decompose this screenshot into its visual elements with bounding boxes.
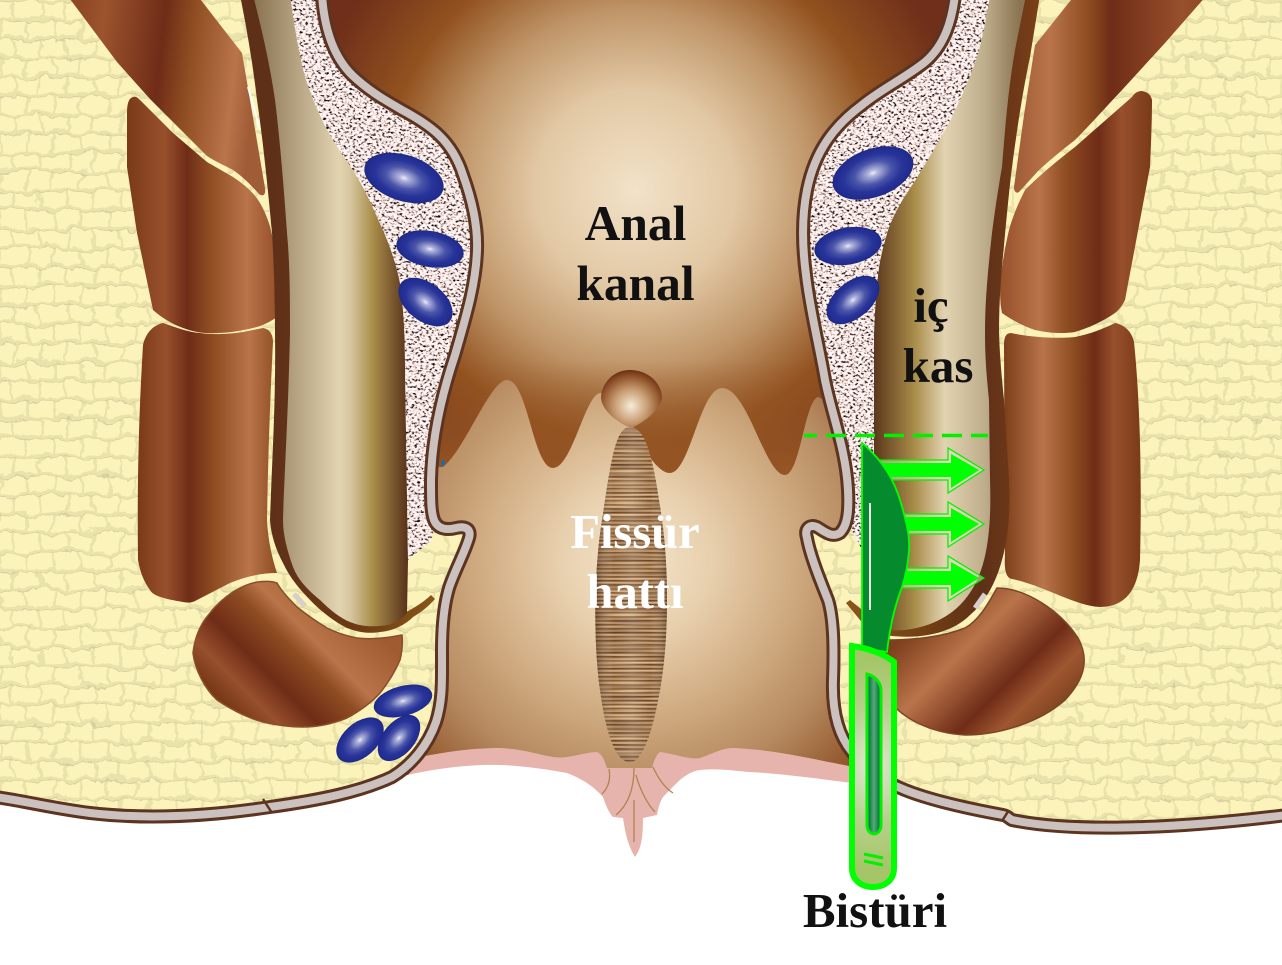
incision level dashed line bbox=[804, 434, 988, 437]
handle slot bbox=[867, 674, 881, 834]
haemorrhoidal veins left bbox=[358, 143, 467, 336]
muscle: left inner tan bbox=[253, 0, 408, 626]
muscle: left upper bbox=[67, 0, 265, 195]
muscle: right upper bbox=[1014, 0, 1207, 193]
label: iç kas: iç bbox=[913, 278, 949, 333]
sentinel polyp bbox=[601, 370, 662, 428]
icon: muscle outer band left bbox=[240, 0, 435, 633]
scalpel bbox=[852, 443, 909, 887]
right internal sphincter bbox=[846, 0, 1040, 637]
white outside body bbox=[0, 765, 1282, 965]
muscle: right middle bbox=[1000, 91, 1152, 333]
label: Anal kanal: kanal bbox=[576, 256, 695, 311]
label: Anal kanal: Anal bbox=[585, 196, 686, 251]
label: Fissür hattı: Fissür bbox=[570, 506, 700, 559]
fissure line bbox=[595, 427, 667, 762]
haemorrhoidal veins lower left bbox=[328, 679, 436, 771]
submucosa speckle left bbox=[290, 0, 470, 560]
left internal sphincter bbox=[240, 0, 435, 633]
rectal wall right bbox=[803, 0, 1282, 828]
right outer sphincter muscles bbox=[885, 0, 1207, 735]
label: Fissür hattı: hattı bbox=[586, 566, 684, 619]
muscle: left middle bbox=[127, 97, 277, 333]
anal canal lumen bbox=[329, 0, 948, 775]
scalpel blade bbox=[862, 443, 909, 652]
muscle: right ring bbox=[885, 588, 1084, 735]
arrows: sphincterotomy direction bbox=[877, 448, 984, 601]
submucosa speckle right bbox=[810, 0, 990, 548]
haemorrhoidal veins right bbox=[811, 136, 921, 334]
muscle: right lower bbox=[1004, 323, 1141, 607]
icon: small blue mark bbox=[441, 460, 445, 466]
muscle: left ring bbox=[193, 581, 402, 727]
arrow 1 bbox=[877, 448, 984, 493]
scalpel handle bbox=[852, 646, 894, 887]
icon: muscle outer band right bbox=[846, 0, 1040, 637]
anal skin tags bbox=[602, 767, 673, 842]
rectal wall left bbox=[0, 0, 477, 817]
muscle: left lower bbox=[138, 323, 277, 603]
label: iç kas: kas bbox=[903, 338, 973, 393]
anal verge skin bbox=[395, 748, 860, 860]
arrow 2 bbox=[877, 502, 984, 547]
left outer sphincter muscles bbox=[67, 0, 402, 727]
label: Bistüri: Bistüri bbox=[803, 883, 947, 938]
arrow 3 bbox=[877, 556, 984, 601]
lower canal with mucosal folds bbox=[407, 380, 849, 775]
muscle: right inner tan bbox=[872, 0, 1026, 630]
